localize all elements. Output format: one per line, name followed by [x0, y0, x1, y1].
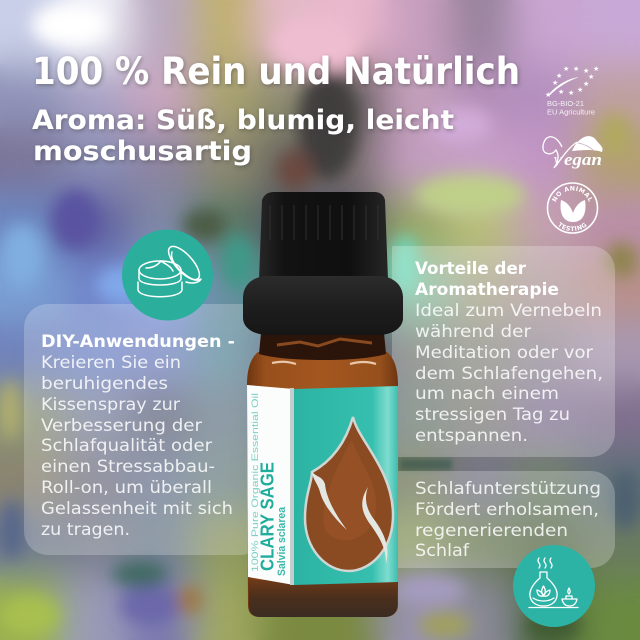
text block: Vorteile der Aromatherapie: Aromatherapie	[415, 280, 559, 300]
text block: Schlafunterstützung: Fördert erholsamen,	[415, 500, 599, 520]
label teal	[294, 386, 398, 585]
text block: Vorteile der Aromatherapie: Vorteile der	[415, 259, 527, 279]
icon: cream jar	[122, 230, 213, 320]
icon: no animal testing logo: TESTING	[558, 222, 587, 231]
bottle base shadow	[249, 580, 397, 617]
icon: EU organic logo: BG-BIO-21	[547, 101, 584, 108]
text block: Schlafunterstützung: regenerierenden	[415, 521, 568, 541]
text block: Vorteile der Aromatherapie: um nach einem	[415, 384, 559, 404]
icon: EU organic logo: ★	[593, 65, 599, 73]
text block: Vorteile der Aromatherapie: entspannen.	[415, 426, 528, 446]
icon: EU organic logo: ★	[577, 86, 583, 94]
icon: EU organic logo: ★	[563, 65, 569, 73]
neck highlights	[277, 339, 372, 346]
icon: aroma diffuser	[513, 545, 595, 627]
glass body	[247, 352, 398, 617]
text block: Schlafunterstützung: Schlafunterstützung	[415, 479, 601, 499]
icon: EU organic logo: ★	[573, 65, 579, 73]
text block: Vorteile der Aromatherapie	[415, 259, 603, 446]
vertical label text: CLARY SAGE	[258, 462, 278, 571]
text block: DIY-Anwendungen: Schlafqualität oder	[41, 436, 212, 456]
icon: EU organic logo: EU Agriculture	[547, 110, 595, 116]
icon: no animal testing logo: NO ANIMAL	[552, 186, 592, 202]
text block: DIY-Anwendungen: beruhigendes	[41, 374, 168, 394]
vertical label text	[250, 393, 288, 576]
vertical label text: 100% Pure Organic Essential Oil	[250, 393, 260, 572]
icon: Vegan logo: egan	[564, 150, 602, 169]
text block: Vorteile der Aromatherapie: dem Schlafengehen,	[415, 364, 603, 384]
label white	[247, 385, 294, 585]
icon: no animal testing logo	[546, 182, 598, 234]
text block: Vorteile der Aromatherapie: während der	[415, 322, 531, 342]
panel: sleep support background	[392, 471, 615, 568]
cap ribs	[270, 205, 378, 240]
text block: DIY-Anwendungen: Kreieren Sie ein	[41, 353, 181, 373]
dark band between panels	[400, 459, 452, 470]
shoulder highlights	[272, 362, 376, 364]
title: 100 % Rein und Natürlich	[32, 50, 520, 93]
text block: DIY-Anwendungen: zu tragen.	[41, 520, 130, 540]
icon: EU organic logo: ★	[556, 72, 562, 80]
panel: aromatherapy background	[392, 246, 615, 457]
icon: EU organic logo: ★	[558, 88, 564, 96]
text block: DIY-Anwendungen	[41, 332, 235, 540]
vertical label text: Salvia sclarea	[276, 506, 288, 576]
subtitle: aroma	[32, 105, 454, 167]
neck	[259, 333, 386, 360]
drop on label	[305, 417, 393, 571]
text block: Vorteile der Aromatherapie: Meditation oder vor	[415, 343, 593, 363]
icon: EU organic logo: ★	[545, 91, 551, 99]
text block: Schlafunterstützung: Schlaf	[415, 541, 470, 561]
cap collar	[243, 276, 403, 335]
text block: DIY-Anwendungen: einen Stressabbau-	[41, 457, 215, 477]
icon: Vegan logo: V	[553, 155, 563, 170]
icon: EU organic logo: ★	[568, 89, 574, 97]
icon: EU organic logo: ★	[583, 80, 589, 88]
text block: DIY-Anwendungen: Kissenspray zur	[41, 395, 180, 415]
cap	[259, 192, 388, 280]
text block: DIY-Anwendungen: DIY-Anwendungen -	[41, 332, 235, 352]
text block: DIY-Anwendungen: Gelassenheit mit sich	[41, 499, 233, 519]
text block: DIY-Anwendungen: Verbesserung der	[41, 416, 202, 436]
text block: Schlafunterstützung	[415, 479, 601, 561]
text block: Vorteile der Aromatherapie: stressigen Tag zu	[415, 405, 570, 425]
bottle	[243, 192, 403, 617]
icon: EU organic logo: ★	[552, 79, 558, 87]
panel: DIY background	[24, 304, 264, 555]
text block: DIY-Anwendungen: Roll-on, um überall	[41, 478, 212, 498]
subtitle: aroma: moschusartig	[33, 136, 252, 167]
icon: EU organic logo: ★	[588, 73, 594, 81]
icon: EU organic logo: ★	[583, 67, 589, 75]
text block: Vorteile der Aromatherapie: Ideal zum Vernebeln	[415, 301, 602, 321]
subtitle: aroma: Aroma: Süß, blumig, leicht	[32, 105, 454, 136]
icon: EU organic logo	[545, 65, 599, 116]
icon: Vegan logo	[543, 136, 603, 170]
label divider	[290, 388, 294, 585]
